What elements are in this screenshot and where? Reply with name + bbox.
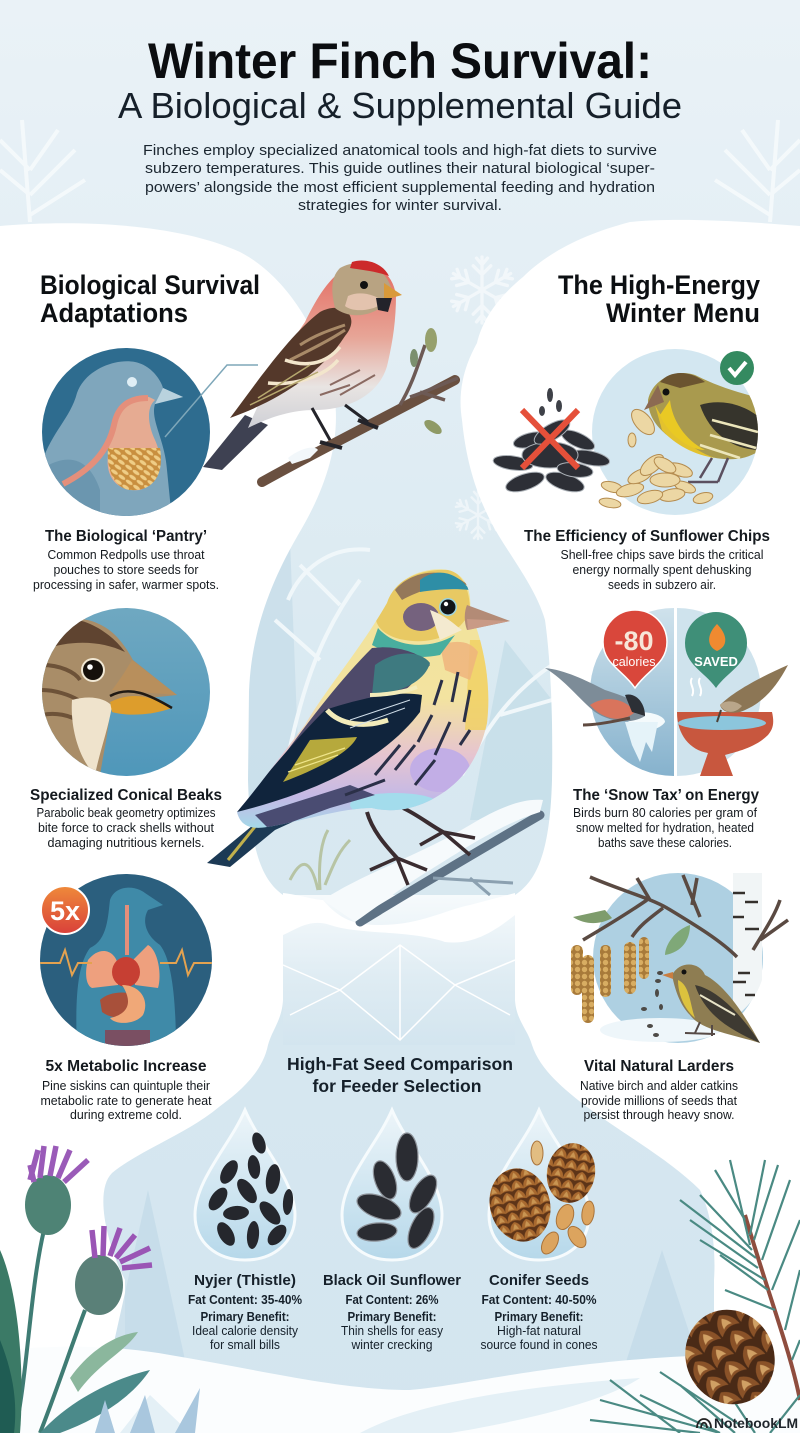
text block: specialized conical beaks: bite force to crack shells without: [38, 821, 215, 835]
intro paragraph: subzero temperatures. This guide outlines their natural biological ‘super-: [145, 161, 655, 177]
text block: vital natural larders: persist through heavy snow.: [584, 1108, 734, 1122]
text block: black oil sunflower: Fat Content: 26%: [346, 1293, 438, 1307]
intro paragraph: Finches employ specialized anatomical tools and high-fat diets to survive: [143, 143, 657, 159]
text block: 5x metabolic increase: metabolic rate to generate heat: [40, 1094, 212, 1108]
icon: metabolic increase circle: 5x: [50, 896, 80, 926]
icon: sunflower chips vs shells circle: [492, 349, 760, 515]
text block: the snow tax on energy: [573, 787, 759, 850]
text block: the biological pantry: Common Redpolls use throat: [48, 548, 205, 562]
heading: high-fat seed comparison: for Feeder Selection: [312, 1076, 482, 1096]
text block: nyjer: [188, 1272, 302, 1352]
seed comparison: nyjer: [195, 1110, 295, 1260]
text block: conifer seeds: Primary Benefit:: [494, 1310, 584, 1324]
icon: snow tax split circle: -80: [614, 626, 654, 656]
illustration: pine branch and cone: [590, 1160, 800, 1433]
watermark: notebooklm: NotebookLM: [714, 1415, 798, 1431]
title: [118, 33, 682, 126]
text block: the snow tax on energy: Birds burn 80 calories per gram of: [573, 806, 758, 820]
text block: efficiency of sunflower chips: [524, 528, 770, 592]
seed comparison: black oil sunflower: [342, 1110, 442, 1260]
text block: conifer seeds: [480, 1272, 598, 1352]
text block: the snow tax on energy: The ‘Snow Tax’ on Energy: [573, 787, 759, 804]
text block: the biological pantry: processing in safer, warmer spots.: [33, 578, 219, 592]
text block: 5x metabolic increase: during extreme cold.: [70, 1108, 182, 1122]
icon: biological pantry circle: [40, 348, 258, 520]
text block: black oil sunflower: [323, 1272, 461, 1352]
illustration: common redpoll on branch: [203, 261, 458, 482]
text block: efficiency of sunflower chips: Shell-free chips save birds the critical: [560, 548, 764, 562]
text block: 5x metabolic increase: Pine siskins can quintuple their: [42, 1079, 210, 1093]
text block: nyjer: Nyjer (Thistle): [194, 1272, 296, 1289]
heading: the high-energy winter menu: Winter Menu: [606, 298, 760, 328]
text block: conifer seeds: Conifer Seeds: [489, 1272, 589, 1289]
text block: the biological pantry: The Biological ‘Pantry’: [45, 528, 207, 545]
heading: biological survival adaptations: Biological Survival: [40, 270, 260, 300]
heading: biological survival adaptations: [40, 270, 260, 328]
text block: specialized conical beaks: [30, 787, 222, 850]
text block: the biological pantry: [33, 528, 219, 592]
text block: conifer seeds: source found in cones: [480, 1338, 598, 1352]
text block: efficiency of sunflower chips: energy normally spent dehusking: [572, 563, 752, 577]
text block: nyjer: Primary Benefit:: [200, 1310, 290, 1324]
text block: nyjer: Ideal calorie density: [192, 1324, 299, 1338]
text block: the snow tax on energy: baths save these calories.: [598, 836, 732, 850]
seed comparison: conifer seeds: [481, 1110, 600, 1260]
panel: right white column: [461, 220, 800, 1433]
decorative snowflakes and header ferns: [0, 120, 800, 539]
text block: black oil sunflower: Primary Benefit:: [348, 1310, 436, 1324]
icon: vital natural larders circle: [571, 873, 788, 1043]
illustration: thistles: [0, 1146, 200, 1433]
heading: high-fat seed comparison: [287, 1054, 513, 1096]
panel: left white column: [0, 223, 336, 1433]
heading: the high-energy winter menu: The High-Energy: [558, 270, 760, 300]
icon: metabolic increase circle: [40, 874, 212, 1050]
text block: nyjer: Fat Content: 35-40%: [188, 1293, 302, 1307]
heading: biological survival adaptations: Adaptations: [40, 298, 188, 328]
snow mound with ice facets: [283, 893, 515, 1045]
heading: high-fat seed comparison: High-Fat Seed Comparison: [287, 1054, 513, 1074]
text block: black oil sunflower: Thin shells for easy: [341, 1324, 444, 1338]
text block: 5x metabolic increase: 5x Metabolic Increase: [46, 1058, 207, 1075]
intro paragraph: [143, 143, 657, 214]
bottom snow hills and distant trees: [0, 1190, 800, 1433]
text block: specialized conical beaks: Specialized Conical Beaks: [30, 787, 222, 804]
text block: efficiency of sunflower chips: seeds in subzero air.: [608, 578, 716, 592]
text block: specialized conical beaks: damaging nutritious kernels.: [48, 836, 204, 850]
icon: snow tax split circle: SAVED: [694, 654, 738, 669]
text block: black oil sunflower: winter crecking: [351, 1338, 433, 1352]
winter trees behind the central finch: [248, 540, 552, 890]
text block: 5x metabolic increase: [40, 1058, 212, 1122]
icon: conical beak circle: [30, 608, 210, 780]
icon: snow tax split circle: calories: [612, 655, 656, 669]
text block: conifer seeds: High-fat natural: [497, 1324, 581, 1338]
text block: vital natural larders: Vital Natural Larders: [584, 1058, 734, 1075]
intro paragraph: powers’ alongside the most efficient supplemental feeding and hydration: [145, 180, 655, 196]
title: Winter Finch Survival:: [148, 33, 652, 89]
text block: efficiency of sunflower chips: The Efficiency of Sunflower Chips: [524, 528, 770, 545]
text block: conifer seeds: Fat Content: 40-50%: [482, 1293, 596, 1307]
text block: vital natural larders: Native birch and alder catkins: [580, 1079, 738, 1093]
text block: the snow tax on energy: snow melted for hydration, heated: [576, 821, 754, 835]
illustration: central finch on snowy branch: [207, 569, 543, 922]
title: A Biological & Supplemental Guide: [118, 85, 682, 126]
text block: vital natural larders: [580, 1058, 738, 1122]
text block: nyjer: for small bills: [210, 1338, 280, 1352]
intro paragraph: strategies for winter survival.: [298, 198, 502, 214]
text block: the biological pantry: pouches to store seeds for: [54, 563, 198, 577]
text block: black oil sunflower: Black Oil Sunflower: [323, 1272, 461, 1289]
heading: the high-energy winter menu: [558, 270, 760, 328]
text block: specialized conical beaks: Parabolic beak geometry optimizes: [36, 806, 216, 820]
text block: vital natural larders: provide millions of seeds that: [581, 1094, 738, 1108]
icon: snow tax split circle: [545, 608, 788, 776]
